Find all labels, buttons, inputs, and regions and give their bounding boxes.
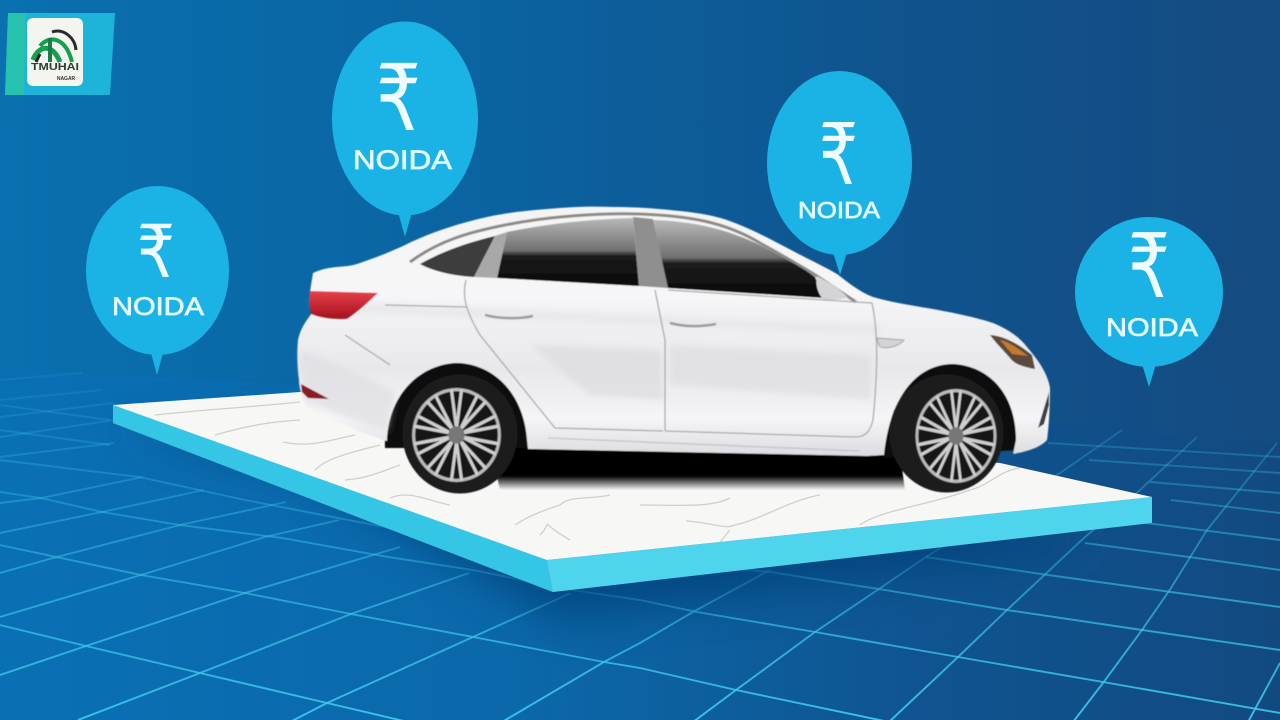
rear side window [497,218,639,286]
logo wordmark: TMUHAI [31,62,79,73]
rupee glyph 4: ₹ [1128,216,1170,316]
door handles [485,315,716,326]
body shading [300,300,880,430]
perspective floor with grid [0,368,1280,720]
pin 1: left rupee Noida [86,186,229,375]
label 2: NOIDA [353,145,452,175]
mirror [816,276,848,301]
car [297,207,1050,494]
logo arcs [33,31,76,62]
door pillar [633,217,668,288]
rear quarter window [420,236,495,277]
pin 3: centre rupee Noida [767,71,912,275]
under-car shadow [490,446,905,490]
front wheel [890,374,1004,492]
pin 2: top rupee Noida [332,22,478,237]
door seams [345,280,877,451]
rear reflector [301,384,329,399]
front grille [1038,392,1049,428]
fender vent [877,338,904,348]
slab top face [113,392,1152,560]
logo white card [27,18,83,86]
headlight [990,335,1035,369]
logo badge [5,13,115,95]
rupee glyph 1: ₹ [137,212,175,293]
front side window [653,220,824,298]
marble slab platform [113,392,1152,592]
rupee glyph 2: ₹ [376,48,421,150]
rear wheel [402,374,518,494]
slab shadow on floor [120,420,1100,620]
rear pillar [474,232,507,278]
front rim [917,391,995,481]
tail light [309,291,378,319]
label 3: NOIDA [798,197,881,223]
pin 4: right rupee Noida [1075,216,1223,387]
logo small caption: NAGAR [57,76,76,82]
rupee glyph 3: ₹ [819,108,858,203]
car body [297,207,1050,456]
rear rim [414,390,499,480]
roof trim [410,214,856,302]
marble veins [155,402,1020,542]
wheel arches [385,361,1019,458]
label 1: NOIDA [112,293,204,321]
label 4: NOIDA [1106,314,1198,342]
